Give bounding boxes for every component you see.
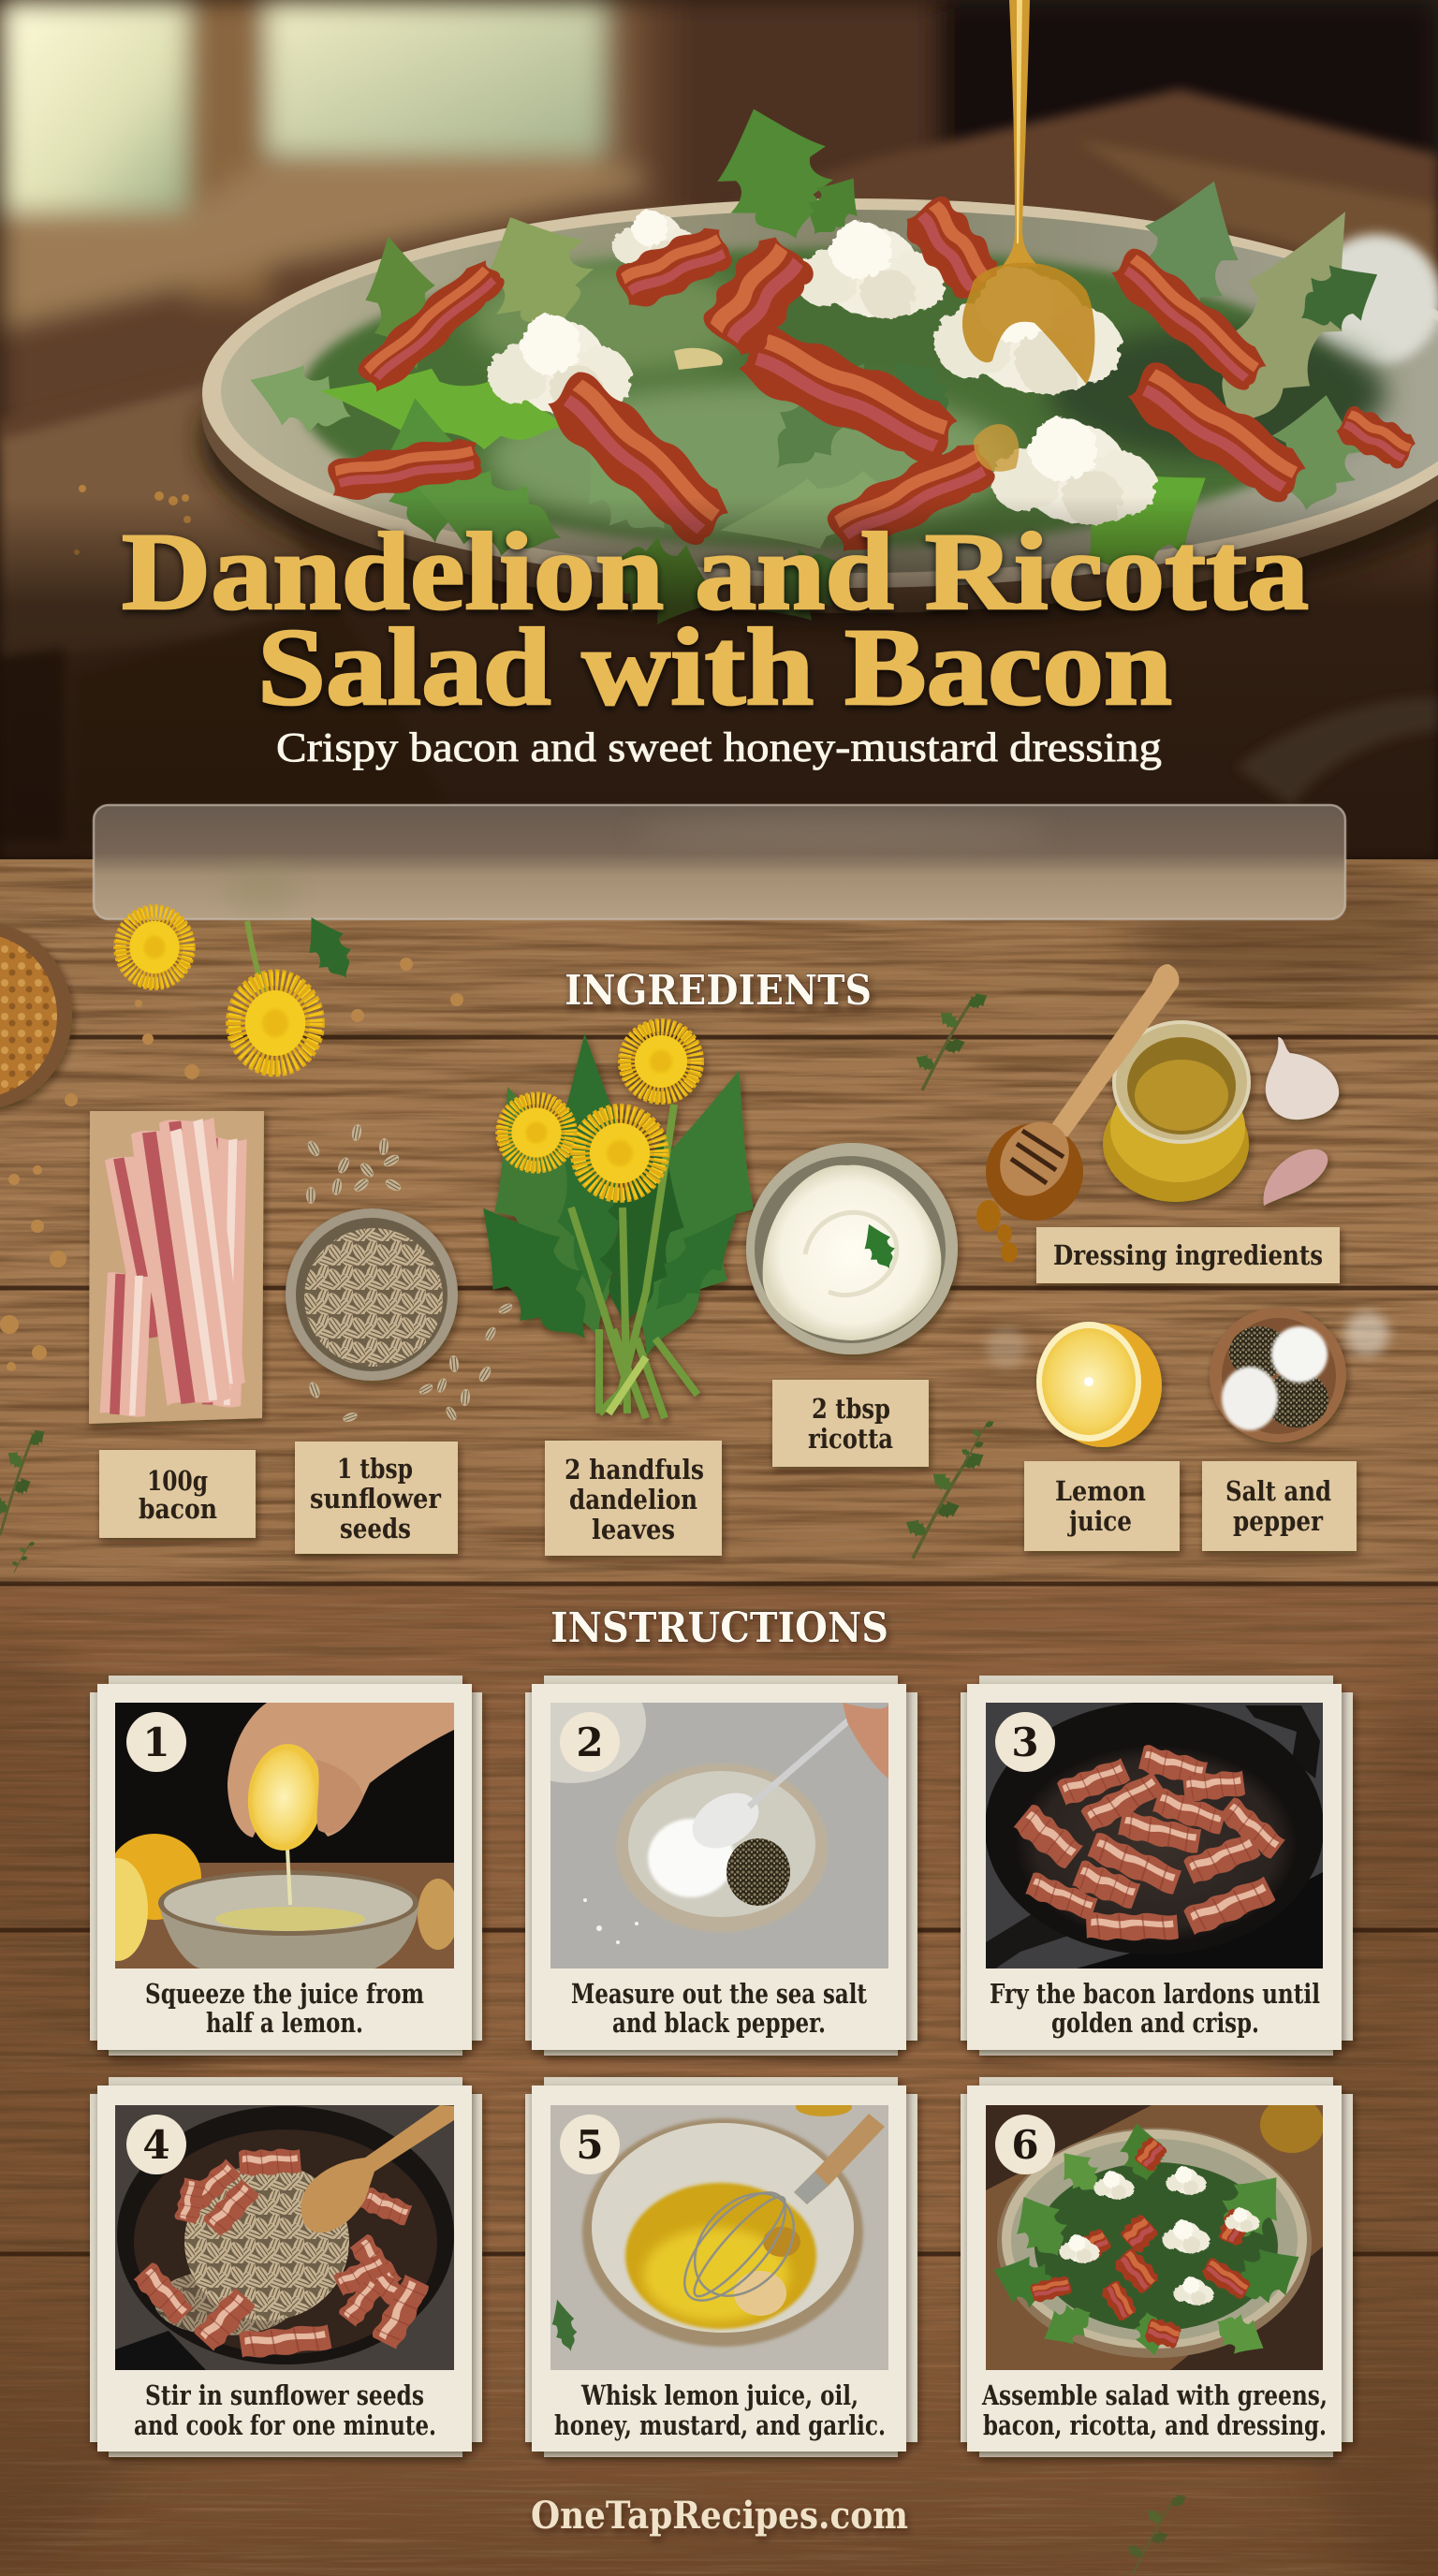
ricotta mounds — [488, 210, 1155, 526]
crumbs bowl — [0, 922, 72, 1109]
ingredient label: dandelion leaves: dandelion — [569, 1484, 697, 1515]
ingredient: sunflower seeds bowl — [286, 1123, 514, 1424]
step 1 photo — [86, 1703, 459, 1969]
footer site name: OneTapRecipes.com — [531, 2494, 908, 2538]
step card 1: half a lemon. — [206, 2007, 363, 2039]
step 6 photo — [985, 2097, 1324, 2370]
olive oil jar — [1103, 1022, 1249, 1202]
step card 5: Whisk lemon juice, oil, — [580, 2379, 858, 2411]
ingredient label: lemon juice — [1024, 1461, 1180, 1551]
garlic bulb — [1266, 1037, 1339, 1120]
ingredient: honey dipper, oil jar, garlic — [976, 964, 1339, 1263]
step card 3: Fry the bacon lardons until — [990, 1978, 1320, 2010]
step 2 photo — [496, 1661, 888, 1969]
instructions heading: INSTRUCTIONS — [550, 1604, 888, 1652]
decor: herb sprig near footer — [1124, 2491, 1189, 2574]
flower two — [234, 979, 316, 1067]
ingredient label: sunflower seeds: seeds — [340, 1513, 411, 1544]
ingredient: salt and pepper dish — [986, 1308, 1389, 1442]
ingredient label: lemon juice: juice — [1066, 1505, 1132, 1537]
ingredient label: sunflower seeds: sunflower — [310, 1483, 442, 1515]
ingredient: dandelion leaves bouquet — [449, 1026, 793, 1418]
honey stream and pool — [674, 0, 1094, 472]
crumbs — [74, 485, 191, 555]
title: Dandelion and Ricotta — [122, 510, 1309, 633]
step 2 badge: 2 — [576, 1720, 604, 1765]
step 1 badge — [126, 1712, 186, 1772]
hero photo: salad bowl by the window — [0, 0, 1438, 859]
ingredient label: dandelion leaves: 2 handfuls — [565, 1454, 704, 1486]
step card 2 — [496, 1661, 917, 2056]
bottom shadow over hero — [0, 496, 1438, 859]
flower one — [121, 912, 188, 983]
ingredient label: ricotta — [772, 1380, 929, 1467]
decorative scattered dandelions and crumbs bowl — [0, 908, 995, 1573]
step 4 badge — [126, 2115, 186, 2174]
step 1 badge: 1 — [142, 1720, 170, 1765]
ingredient label: sunflower seeds — [295, 1442, 458, 1554]
window and wall — [0, 0, 1438, 449]
subtitle: Crispy bacon and sweet honey-mustard dressing — [276, 724, 1162, 770]
ingredient label: dandelion leaves: leaves — [592, 1514, 675, 1545]
step card 4: Stir in sunflower seeds — [145, 2379, 424, 2411]
ingredient label: bacon — [99, 1450, 256, 1538]
step 5 badge: 5 — [576, 2122, 604, 2168]
step card 4: and cook for one minute. — [134, 2409, 436, 2441]
step 2 badge — [560, 1712, 620, 1772]
step 4 photo — [115, 2105, 454, 2370]
spoon shadow shape right — [1236, 697, 1438, 805]
step 3 photo — [985, 1702, 1324, 1975]
step 6 badge: 6 — [1011, 2122, 1039, 2168]
ingredient label: ricotta: 2 tbsp — [812, 1393, 890, 1425]
ingredient label: dressing — [1036, 1227, 1340, 1283]
garlic clove — [1263, 1149, 1328, 1206]
bacon pieces — [326, 188, 1420, 561]
ingredient: ricotta bowl — [746, 1143, 958, 1354]
ingredient label: lemon juice: Lemon — [1055, 1475, 1146, 1507]
step card 6: Assemble salad with greens, — [981, 2379, 1328, 2411]
ingredient label: bacon: 100g — [147, 1465, 208, 1497]
wood tabletop background — [0, 859, 1438, 2576]
herbs — [912, 988, 990, 1090]
step 3 badge: 3 — [1011, 1720, 1039, 1765]
step card 3: golden and crisp. — [1051, 2007, 1259, 2039]
glass banner — [94, 805, 1345, 919]
stem and leaf — [247, 908, 363, 1006]
honey puddle — [986, 1123, 1083, 1221]
step 4 badge: 4 — [142, 2122, 170, 2168]
title: Salad with Bacon — [257, 606, 1172, 728]
step card 1: Squeeze the juice from — [145, 1978, 424, 2010]
step 6 badge — [995, 2115, 1055, 2174]
step 3 badge — [995, 1712, 1055, 1772]
ingredient label: salt and pepper: Salt and — [1225, 1475, 1331, 1507]
ingredient: bacon on parchment — [89, 1111, 264, 1424]
step card 5 — [525, 2077, 917, 2457]
step card 5: honey, mustard, and garlic. — [554, 2409, 886, 2441]
ingredient label: sunflower seeds: 1 tbsp — [337, 1453, 413, 1485]
step card 1 — [86, 1676, 482, 2056]
step card 4 — [90, 2077, 482, 2457]
table surface — [0, 89, 1438, 859]
step card 6 — [961, 2077, 1353, 2457]
step card 3 — [961, 1676, 1353, 2056]
ingredients heading: INGREDIENTS — [565, 967, 872, 1015]
salad greens — [240, 92, 1393, 642]
ingredient label: dandelion leaves — [545, 1441, 722, 1556]
ingredient label: salt and pepper: pepper — [1233, 1505, 1324, 1537]
ingredient label: dressing: Dressing ingredients — [1053, 1239, 1323, 1271]
ingredient: lemon half — [1036, 1322, 1162, 1447]
step card 2: and black pepper. — [612, 2007, 826, 2039]
ingredient label: bacon: bacon — [139, 1493, 217, 1525]
step card 2: Measure out the sea salt — [571, 1978, 867, 2010]
step 5 badge — [560, 2115, 620, 2174]
crumbs — [0, 958, 463, 1371]
step card 6: bacon, ricotta, and dressing. — [983, 2409, 1327, 2441]
honey drops — [976, 1200, 1018, 1263]
ingredient label: ricotta: ricotta — [808, 1423, 893, 1455]
ingredient label: salt and pepper — [1202, 1461, 1357, 1551]
salad bowl — [201, 198, 1438, 627]
title — [122, 510, 1309, 728]
dipper — [986, 964, 1180, 1209]
step 5 photo — [546, 2098, 888, 2370]
